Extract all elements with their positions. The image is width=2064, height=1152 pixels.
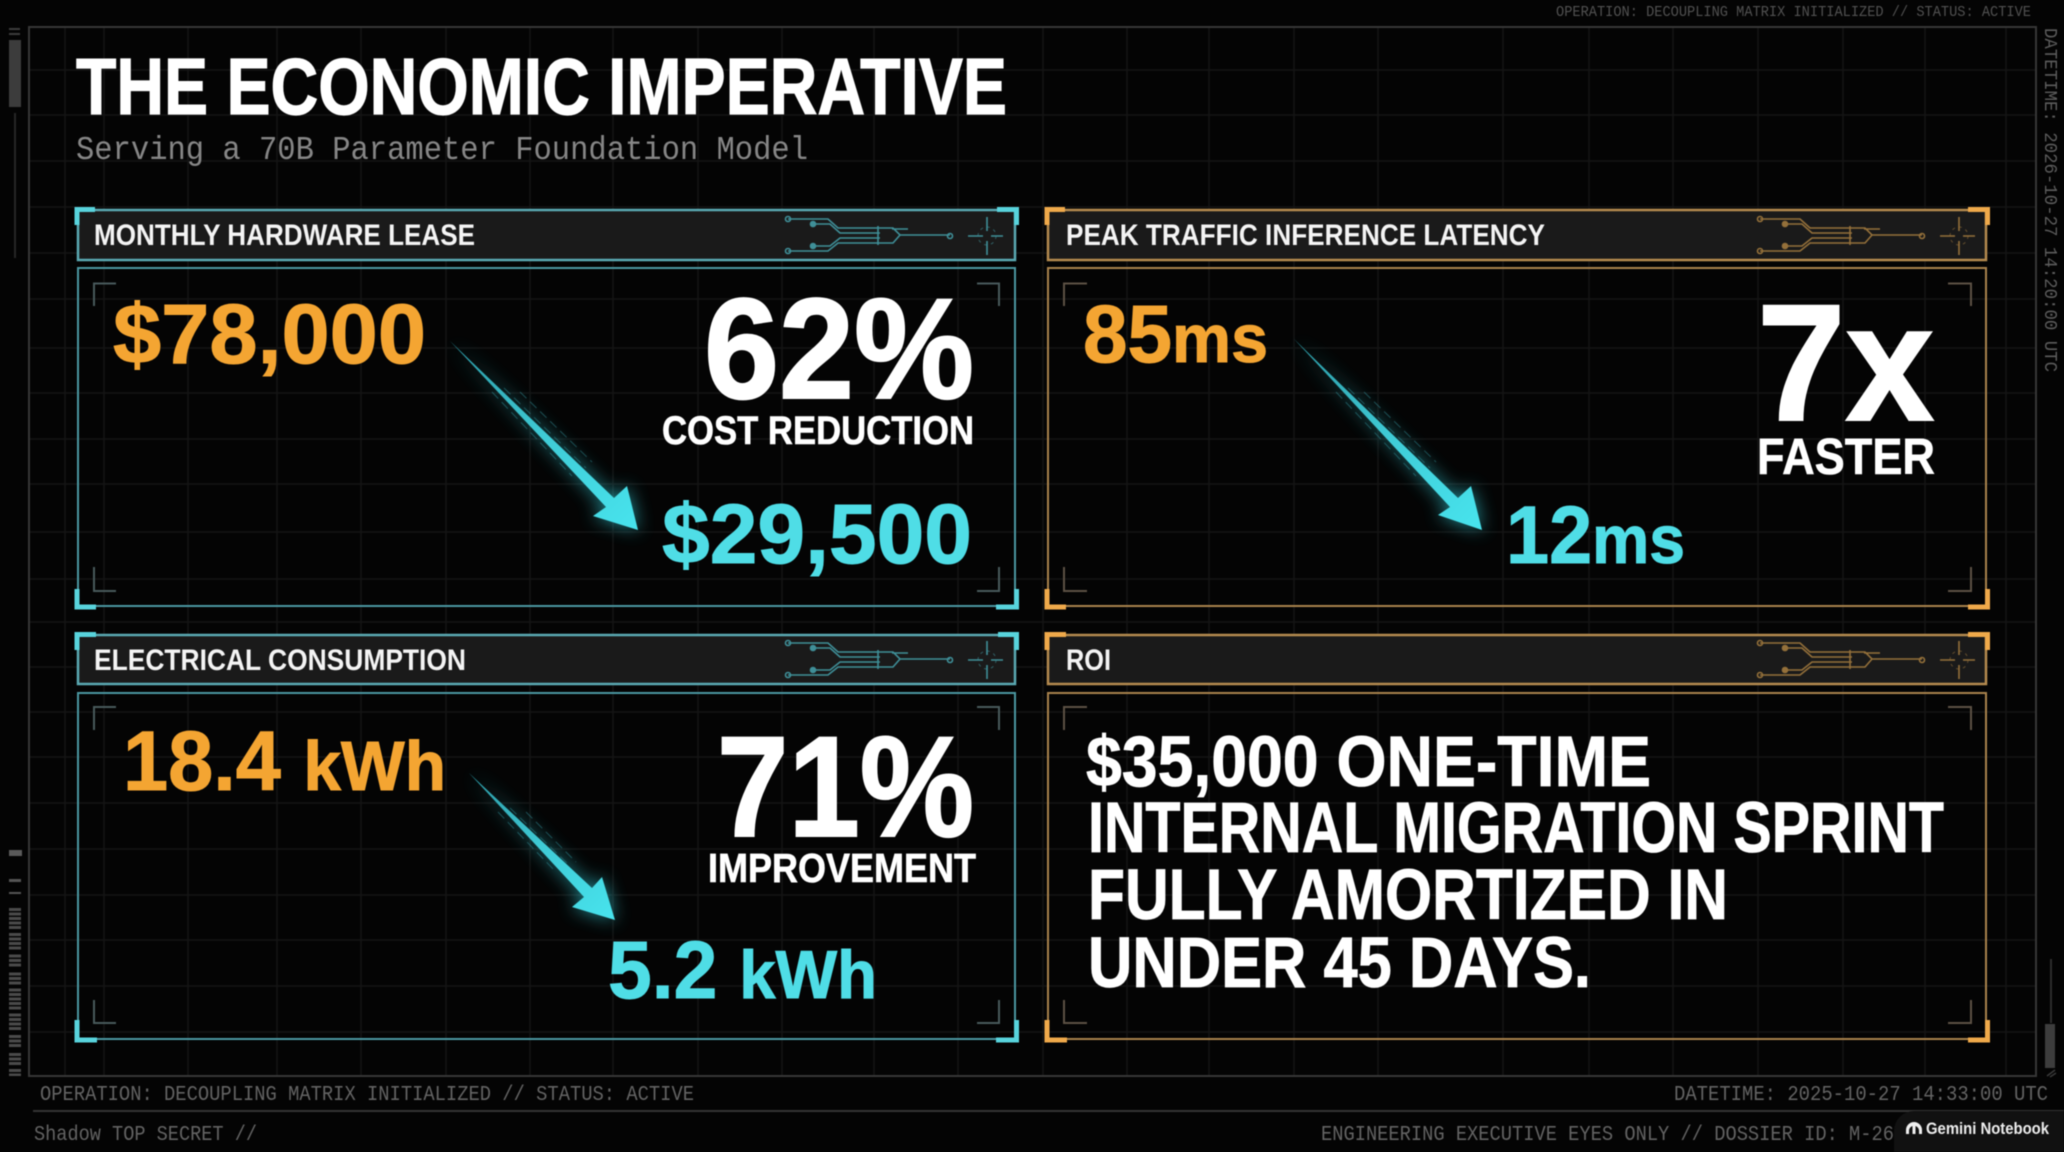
value before: 18.4 kWh <box>123 714 446 808</box>
header label: ROI <box>1066 644 1111 677</box>
vertical datetime: DATETIME: 2026-10-27 14:20:00 UTC <box>2039 28 2059 372</box>
header bar <box>78 635 1015 684</box>
corner accents <box>1047 634 1988 1040</box>
value before: 85ms <box>1083 289 1268 380</box>
body frame <box>1048 268 1986 606</box>
title: THE ECONOMIC IMPERATIVE <box>76 42 1007 131</box>
big stat: 7x <box>1757 271 1934 456</box>
panel: ROI <box>1047 634 1988 1040</box>
ROI statement: FULLY AMORTIZED IN <box>1088 856 1728 935</box>
body frame <box>78 268 1015 606</box>
ROI statement <box>1086 723 1944 1003</box>
top status line: OPERATION: DECOUPLING MATRIX INITIALIZED // STATUS: ACTIVE <box>1556 4 2031 21</box>
header label: ELECTRICAL CONSUMPTION <box>94 644 466 677</box>
corner accents <box>77 210 1016 607</box>
ROI statement: UNDER 45 DAYS. <box>1088 924 1591 1003</box>
corner accents <box>1047 210 1988 607</box>
icon: circuit traces <box>1758 640 1975 679</box>
header bar <box>1048 210 1986 260</box>
right rail marker bottom <box>2045 959 2056 1077</box>
arrow: energy decrease <box>469 773 615 920</box>
body frame <box>1048 693 1986 1039</box>
ROI statement: $35,000 ONE-TIME <box>1086 723 1651 802</box>
header label: MONTHLY HARDWARE LEASE <box>94 219 475 252</box>
stat label: COST REDUCTION <box>662 409 974 453</box>
big stat: 71% <box>717 708 974 867</box>
badge: Gemini Notebook <box>1894 1111 2064 1152</box>
panel: peak traffic inference latency <box>1047 210 1988 607</box>
body frame <box>78 693 1015 1039</box>
icon: circuit traces <box>786 216 1003 255</box>
footer status: OPERATION: DECOUPLING MATRIX INITIALIZED // STATUS: ACTIVE <box>40 1084 694 1107</box>
value before: $78,000 <box>113 287 426 381</box>
panel: monthly hardware lease <box>77 210 1016 607</box>
stat label: IMPROVEMENT <box>708 845 976 891</box>
value after: $29,500 <box>662 487 972 581</box>
corner accents <box>77 634 1016 1040</box>
badge: Gemini Notebook: Gemini Notebook <box>1926 1119 2049 1138</box>
stat label: FASTER <box>1757 428 1935 485</box>
inner brackets <box>1064 284 1971 591</box>
footer classification: Shadow TOP SECRET // <box>34 1124 257 1147</box>
header bar <box>1048 635 1986 684</box>
value after: 12ms <box>1506 490 1685 581</box>
inner brackets <box>94 707 999 1023</box>
icon: circuit traces <box>786 640 1003 679</box>
arrow: latency decrease <box>1294 339 1482 530</box>
header label: PEAK TRAFFIC INFERENCE LATENCY <box>1066 219 1545 252</box>
left rail markers top <box>9 28 21 258</box>
icon: circuit traces <box>1758 216 1975 255</box>
subtitle: Serving a 70B Parameter Foundation Model <box>76 132 808 169</box>
big stat: 62% <box>704 270 974 429</box>
panel: electrical consumption <box>77 634 1016 1040</box>
arrow: cost decrease <box>450 341 638 530</box>
left rail barcode <box>9 850 22 1076</box>
inner brackets <box>94 284 999 591</box>
inner brackets <box>1064 707 1971 1023</box>
header bar <box>78 210 1015 260</box>
footer dossier: ENGINEERING EXECUTIVE EYES ONLY // DOSSIER ID: M-26 <box>1321 1124 1894 1147</box>
value after: 5.2 kWh <box>608 925 877 1016</box>
